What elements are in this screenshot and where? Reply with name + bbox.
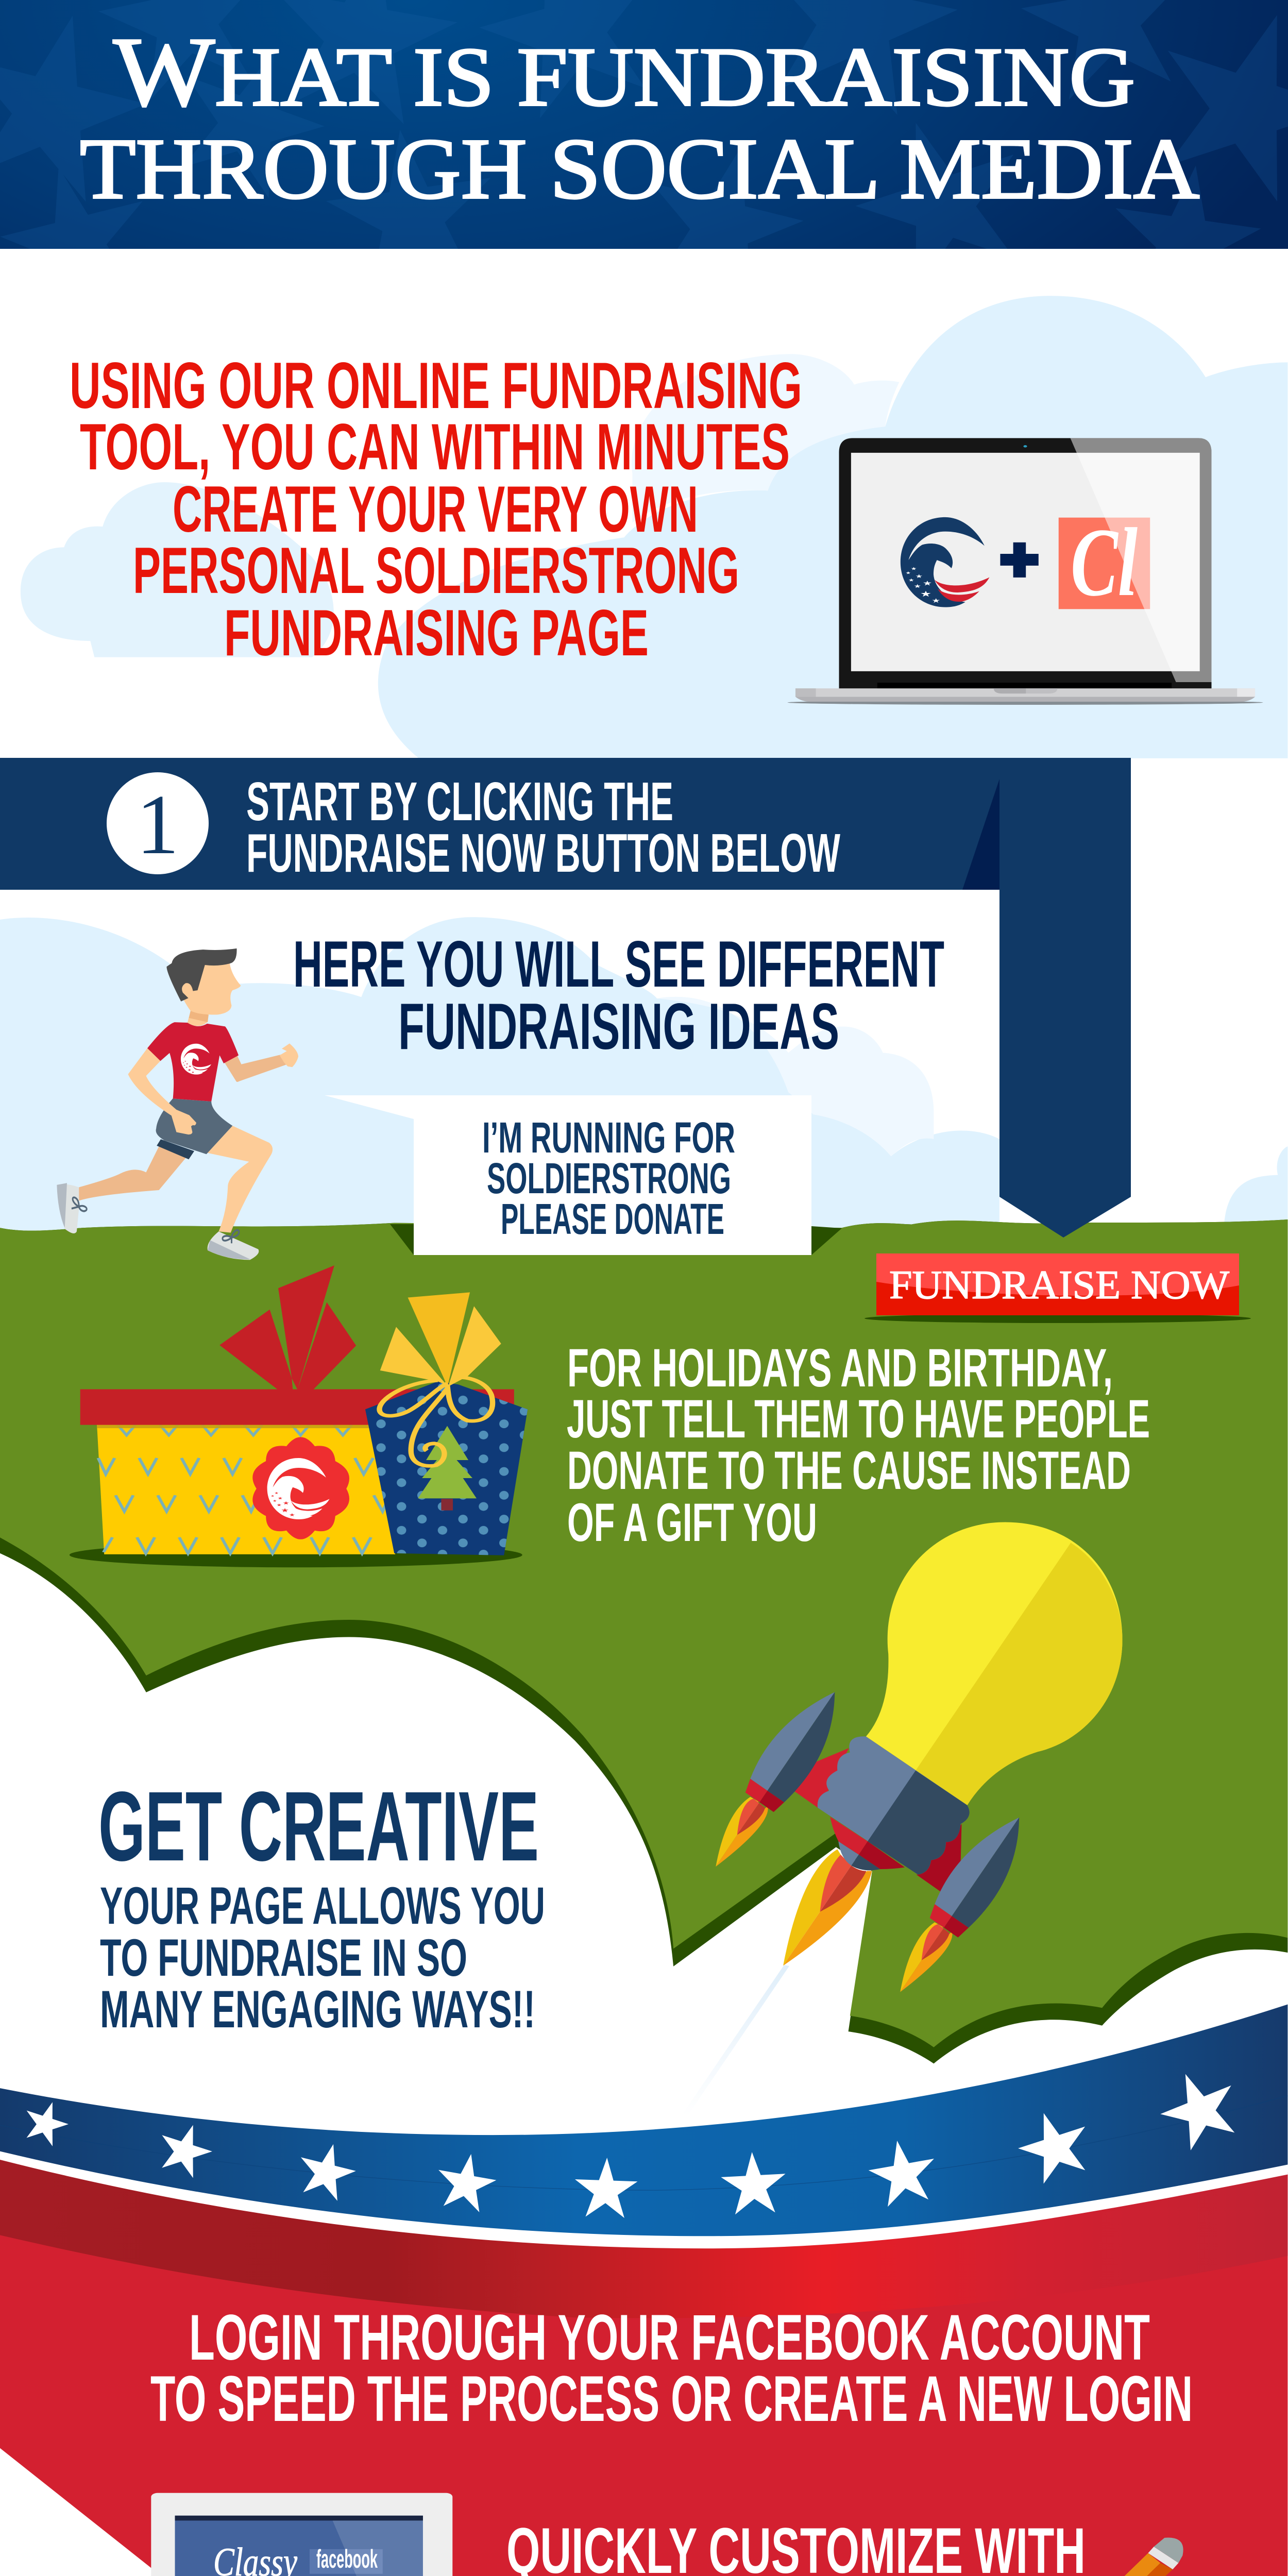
tablet illustration [141, 2493, 453, 2576]
icon: pencil [1063, 2538, 1183, 2576]
get creative text [98, 1771, 545, 2039]
header panel [0, 0, 1288, 249]
step number: 1 [136, 777, 179, 872]
laptop illustration [787, 438, 1263, 705]
shirt logo [181, 1044, 211, 1075]
heading: different ideas: FUNDRAISING IDEAS [398, 990, 839, 1063]
runner illustration [57, 948, 298, 1260]
background cloud: middle [0, 917, 1287, 1240]
background cloud: top left [21, 482, 334, 657]
logo: eagle [901, 517, 989, 607]
intro text: PERSONAL SOLDIERSTRONG [133, 534, 739, 607]
tablet illustration: facebook [316, 2545, 378, 2573]
speech bubble [325, 1095, 842, 1255]
step number [107, 772, 209, 874]
step text: FUNDRAISE NOW BUTTON BELOW [246, 823, 840, 884]
login text [150, 2302, 1193, 2435]
intro text: CREATE YOUR VERY OWN [173, 472, 698, 546]
background cloud: top right [378, 296, 1287, 758]
holidays text [567, 1338, 1150, 1553]
speech bubble: PLEASE DONATE [501, 1195, 724, 1243]
fundraise button small [865, 1253, 1251, 1323]
heading: different ideas [293, 927, 944, 1063]
step text: START BY CLICKING THE [246, 771, 673, 832]
rocket lightbulb illustration [716, 1522, 1123, 1992]
get creative text: GET CREATIVE [98, 1771, 539, 1882]
rocket trail [682, 1965, 789, 2115]
plus icon [1000, 543, 1039, 578]
green ground [0, 1219, 1287, 2063]
speech bubble: SOLDIERSTRONG [487, 1154, 731, 1202]
badge logo [267, 1458, 330, 1519]
intro text: FUNDRAISING PAGE [224, 596, 649, 669]
title: WHAT IS FUNDRAISING [113, 17, 1135, 127]
gifts illustration [70, 1265, 528, 1567]
speech bubble: I’M RUNNING FOR [482, 1113, 735, 1162]
get creative text: MANY ENGAGING WAYS!! [100, 1980, 535, 2039]
logo: classy: Cl [1071, 509, 1138, 617]
red section background [0, 2151, 1287, 2576]
title: THROUGH SOCIAL MEDIA [80, 121, 1199, 217]
fundraise button small: FUNDRAISE NOW [889, 1262, 1229, 1307]
get creative text: TO FUNDRAISE IN SO [100, 1928, 467, 1987]
intro text: TOOL, YOU CAN WITHIN MINUTES [80, 410, 790, 483]
gift badge [252, 1437, 349, 1539]
stars banner [0, 2004, 1287, 2236]
intro text: USING OUR ONLINE FUNDRAISING [70, 349, 802, 422]
step text [246, 771, 840, 884]
get creative text: YOUR PAGE ALLOWS YOU [100, 1876, 545, 1935]
step 1 ribbon arrow [0, 758, 1131, 1238]
title [80, 17, 1199, 217]
intro text [70, 349, 802, 669]
holidays text: OF A GIFT YOU [567, 1493, 817, 1553]
